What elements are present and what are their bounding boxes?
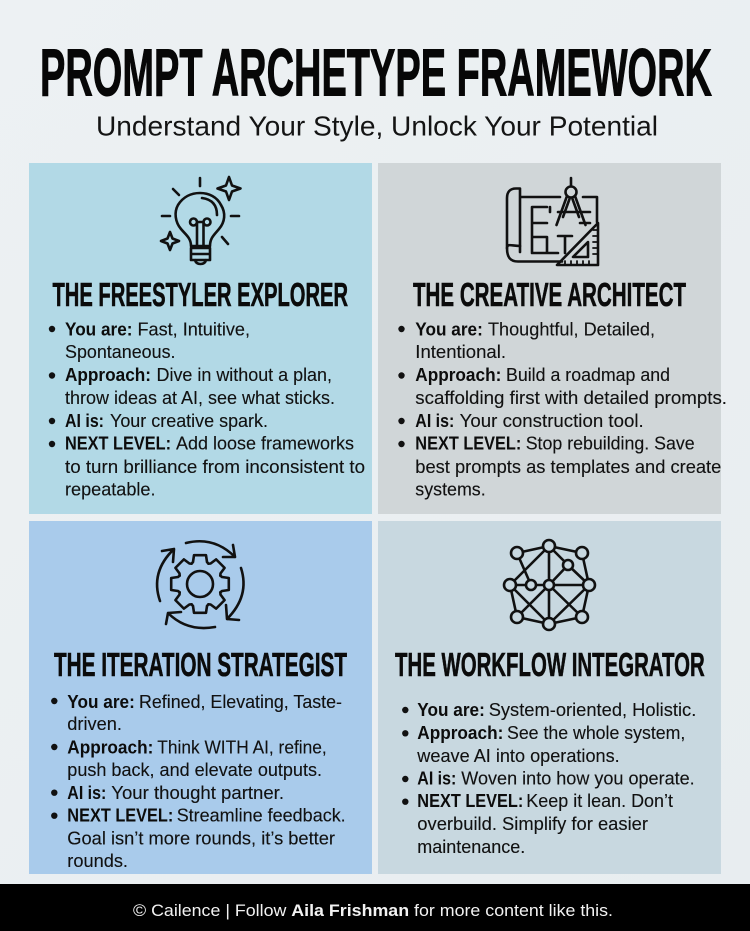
bullet list: freestyler: Add loose frameworks: [176, 432, 354, 454]
icon: blueprint with compass and set square: [507, 178, 598, 265]
bullet list: freestyler: Dive in without a plan,: [156, 364, 332, 385]
bullet list: freestyler: NEXT LEVEL:: [65, 432, 171, 454]
heading: the freestyler explorer: THE FREESTYLER EXPLORER: [52, 277, 348, 314]
bullet list: architect: You are:: [415, 318, 483, 340]
subtitle: Understand Your Style, Unlock Your Potential: [96, 110, 658, 142]
bullet list: architect: Build a roadmap and: [506, 364, 670, 385]
bullet list: integrator: Woven into how you operate.: [461, 768, 695, 788]
bullet list: freestyler: repeatable.: [65, 478, 156, 500]
footer bar: [0, 884, 750, 931]
bullet list: architect: Stop rebuilding. Save: [526, 432, 695, 454]
bullet list: integrator: Keep it lean. Don’t: [526, 790, 673, 811]
bullet list: integrator: overbuild. Simplify for easier: [417, 813, 648, 834]
bullet list: strategist: Refined, Elevating, Taste-: [139, 691, 342, 712]
bullet list: integrator: NEXT LEVEL:: [417, 790, 523, 811]
icon: gear with circular arrows: [157, 541, 244, 628]
bullet list: architect: Thoughtful, Detailed,: [488, 318, 655, 340]
bullet list: integrator: weave AI into operations.: [416, 745, 620, 766]
icon: connected network nodes: [504, 540, 595, 630]
bullet list: architect: Intentional.: [415, 341, 506, 362]
bullet list: strategist: Your thought partner.: [111, 782, 284, 803]
bullet list: architect: [398, 318, 727, 500]
bullet list: strategist: [51, 691, 346, 871]
bullet list: freestyler: to turn brilliance from inconsistent to: [65, 456, 365, 477]
bullet list: strategist: NEXT LEVEL:: [67, 804, 173, 826]
bullet list: strategist: driven.: [67, 713, 122, 734]
heading: the iteration strategist: THE ITERATION STRATEGIST: [54, 647, 347, 684]
bullet list: freestyler: throw ideas at AI, see what sticks.: [65, 387, 335, 408]
bullet list: integrator: System-oriented, Holistic.: [489, 699, 696, 720]
bullet list: freestyler: Approach:: [65, 364, 151, 385]
bullet list: strategist: AI is:: [67, 782, 106, 803]
bullet list: integrator: maintenance.: [417, 836, 525, 857]
panel: the freestyler explorer: [29, 163, 372, 514]
bullet list: architect: Your construction tool.: [460, 410, 644, 431]
bullet list: integrator: [402, 699, 696, 857]
panel: the creative architect: [378, 163, 727, 514]
bullet list: strategist: You are:: [67, 691, 135, 712]
bullet list: strategist: Goal isn’t more rounds, it’s better: [67, 828, 335, 848]
bullet list: architect: AI is:: [415, 410, 454, 431]
panel: the iteration strategist: [29, 521, 372, 874]
bullet list: freestyler: Fast, Intuitive,: [138, 318, 250, 340]
bullet list: freestyler: AI is:: [65, 410, 104, 431]
bullet list: strategist: Streamline feedback.: [177, 804, 346, 826]
bullet list: architect: systems.: [415, 478, 486, 500]
bullet list: architect: best prompts as templates and create: [415, 456, 721, 477]
bullet list: integrator: AI is:: [417, 768, 456, 788]
bullet list: freestyler: You are:: [65, 318, 132, 340]
bullet list: freestyler: Spontaneous.: [65, 341, 176, 362]
bullet list: integrator: You are:: [417, 699, 485, 720]
bullet list: strategist: rounds.: [67, 850, 128, 871]
bullet list: architect: Approach:: [415, 364, 501, 385]
icon: light bulb with sparkles: [161, 177, 240, 264]
footer bar: © Cailence | Follow Aila Frishman for more content like this.: [133, 901, 613, 920]
bullet list: architect: NEXT LEVEL:: [415, 432, 521, 454]
panel: the workflow integrator: [378, 521, 721, 874]
bullet list: integrator: See the whole system,: [507, 722, 685, 743]
bullet list: architect: scaffolding first with detailed prompts.: [415, 387, 727, 408]
bullet list: strategist: Think WITH AI, refine,: [157, 736, 327, 758]
bullet list: freestyler: [49, 318, 365, 500]
bullet list: freestyler: Your creative spark.: [110, 410, 268, 431]
bullet list: integrator: Approach:: [417, 722, 503, 743]
bullet list: strategist: Approach:: [67, 736, 153, 758]
bullet list: strategist: push back, and elevate outputs.: [67, 759, 322, 780]
